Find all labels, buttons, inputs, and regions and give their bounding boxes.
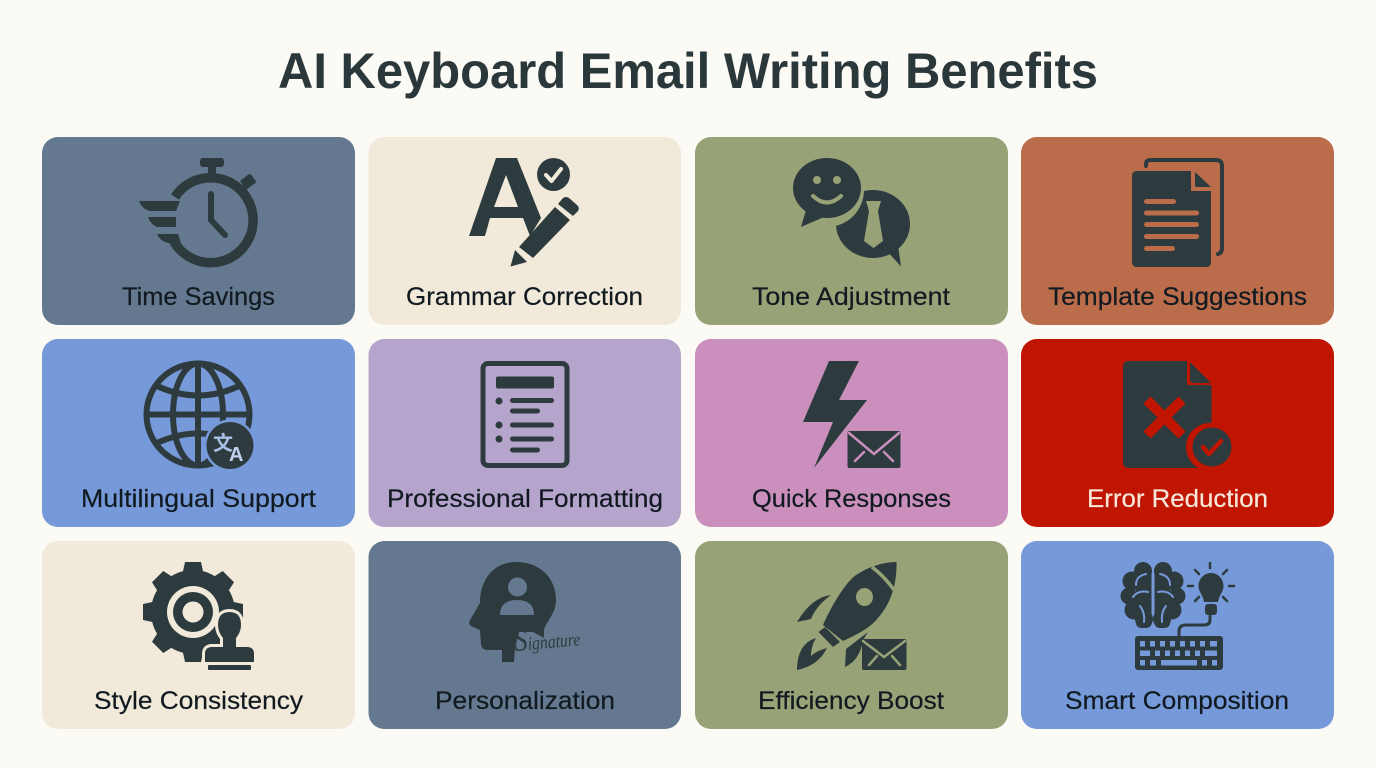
card background [42, 339, 355, 527]
icon: lightning bolt and envelope [803, 361, 900, 468]
card background [695, 339, 1008, 527]
card background [695, 137, 1008, 325]
title: AI Keyboard Email Writing Benefits [278, 43, 1098, 99]
icon: globe with translate badge: 文 [213, 427, 233, 456]
label: Personalization [435, 687, 615, 715]
card background [42, 137, 355, 325]
panel: style consistency [42, 541, 355, 729]
icon: document with cross and check [1123, 361, 1234, 471]
icon: gear and stamp [143, 562, 254, 670]
panel: multilingual support [42, 339, 355, 527]
panel: error reduction [1021, 339, 1334, 527]
card background [1021, 541, 1334, 729]
label: Tone Adjustment [752, 283, 950, 311]
icon: brain, light bulb and keyboard [1120, 562, 1234, 670]
label: Quick Responses [752, 485, 951, 513]
panel: time savings [42, 137, 355, 325]
label: Smart Composition [1065, 687, 1289, 715]
icon: head with person and signature [469, 562, 581, 662]
panel: personalization [368, 541, 681, 729]
icon: globe with translate badge [146, 363, 256, 472]
panel: quick responses [695, 339, 1008, 527]
label: Multilingual Support [81, 485, 316, 513]
card background [368, 137, 681, 325]
label: Time Savings [122, 283, 275, 311]
card background [42, 541, 355, 729]
label: Grammar Correction [406, 283, 643, 311]
panel: tone adjustment [695, 137, 1008, 325]
label: Template Suggestions [1048, 283, 1307, 311]
icon: globe with translate badge: A [229, 444, 243, 466]
card background [1021, 137, 1334, 325]
card background [368, 339, 681, 527]
card background [1021, 339, 1334, 527]
card background [695, 541, 1008, 729]
card background [368, 541, 681, 729]
panel: smart composition [1021, 541, 1334, 729]
icon: formatted document [483, 364, 567, 466]
label: Error Reduction [1087, 485, 1268, 513]
label: Professional Formatting [387, 485, 663, 513]
icon: letter A with pencil and check [469, 158, 579, 266]
label: Efficiency Boost [758, 687, 944, 715]
icon: stacked documents [1132, 160, 1222, 267]
label: Style Consistency [94, 687, 304, 715]
icon: rocket and envelope [797, 562, 906, 670]
icon: stopwatch [139, 158, 256, 263]
panel: professional formatting [368, 339, 681, 527]
panel: efficiency boost [695, 541, 1008, 729]
panel: template suggestions [1021, 137, 1334, 325]
icon: head with person and signature: Signature [512, 616, 581, 658]
icon: speech bubbles with smile and tie [790, 153, 910, 266]
panel: grammar correction [368, 137, 681, 325]
